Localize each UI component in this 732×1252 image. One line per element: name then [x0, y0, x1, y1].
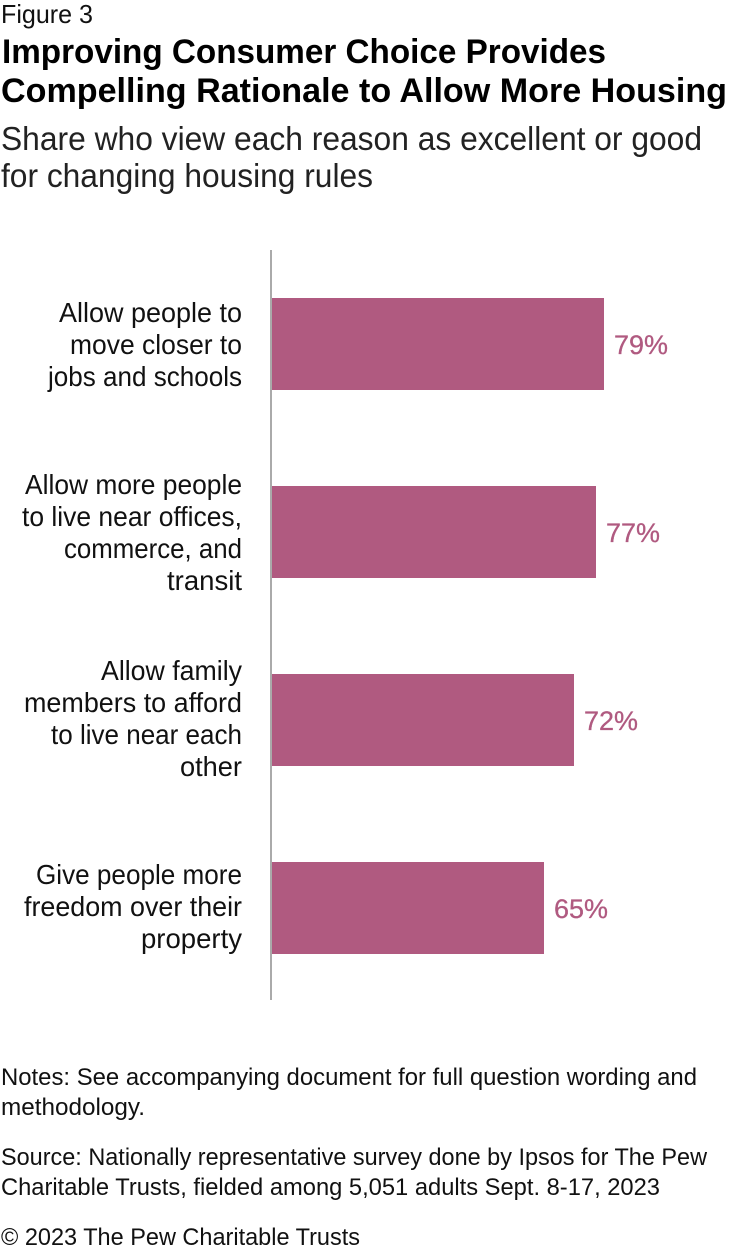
category label: other: [180, 751, 242, 782]
category label: to live near offices,: [22, 501, 242, 532]
source: [1, 1144, 707, 1201]
category label: Allow family: [101, 655, 242, 686]
value: 72%: [584, 706, 638, 736]
value: 79%: [614, 330, 668, 360]
source: Charitable Trusts, fielded among 5,051 adults Sept. 8-17, 2023: [1, 1174, 660, 1201]
value: 77%: [606, 518, 660, 548]
subtitle: Share who view each reason as excellent or good: [1, 121, 702, 158]
category label: Allow people to: [59, 297, 242, 328]
category label: to live near each: [51, 719, 242, 750]
bar chart: [22, 250, 668, 1000]
row: family near each other: [24, 655, 638, 782]
bar 72%: [272, 674, 574, 766]
category label: Give people more: [36, 859, 242, 890]
subtitle: for changing housing rules: [1, 158, 373, 195]
source: Source: Nationally representative survey done by Ipsos for The Pew: [1, 1144, 707, 1171]
bar 77%: [272, 486, 596, 578]
bar 65%: [272, 862, 544, 954]
category label: commerce, and: [64, 533, 242, 564]
row: near offices, commerce, transit: [22, 469, 660, 596]
notes: methodology.: [1, 1094, 145, 1121]
category label: transit: [167, 565, 242, 596]
row: closer to jobs and schools: [47, 297, 668, 392]
category label: property: [141, 923, 242, 954]
row: freedom over property: [24, 859, 608, 954]
copyright: © 2023 The Pew Charitable Trusts: [1, 1224, 360, 1251]
subtitle: [1, 121, 702, 195]
category label: [47, 297, 242, 392]
category label: [24, 655, 242, 782]
bar 79%: [272, 298, 604, 390]
category label: Allow more people: [25, 469, 242, 500]
title: [1, 33, 727, 110]
category label: [24, 859, 242, 954]
notes: Notes: See accompanying document for full question wording and: [1, 1064, 697, 1091]
category label: freedom over their: [24, 891, 242, 922]
category label: move closer to: [70, 329, 242, 360]
value: 65%: [554, 894, 608, 924]
title: Compelling Rationale to Allow More Housing: [1, 72, 727, 110]
category label: members to afford: [24, 687, 242, 718]
title: Improving Consumer Choice Provides: [2, 33, 606, 71]
vertical axis: [270, 250, 272, 1000]
category label: [22, 469, 242, 596]
category label: jobs and schools: [47, 361, 242, 392]
notes: [1, 1064, 697, 1121]
